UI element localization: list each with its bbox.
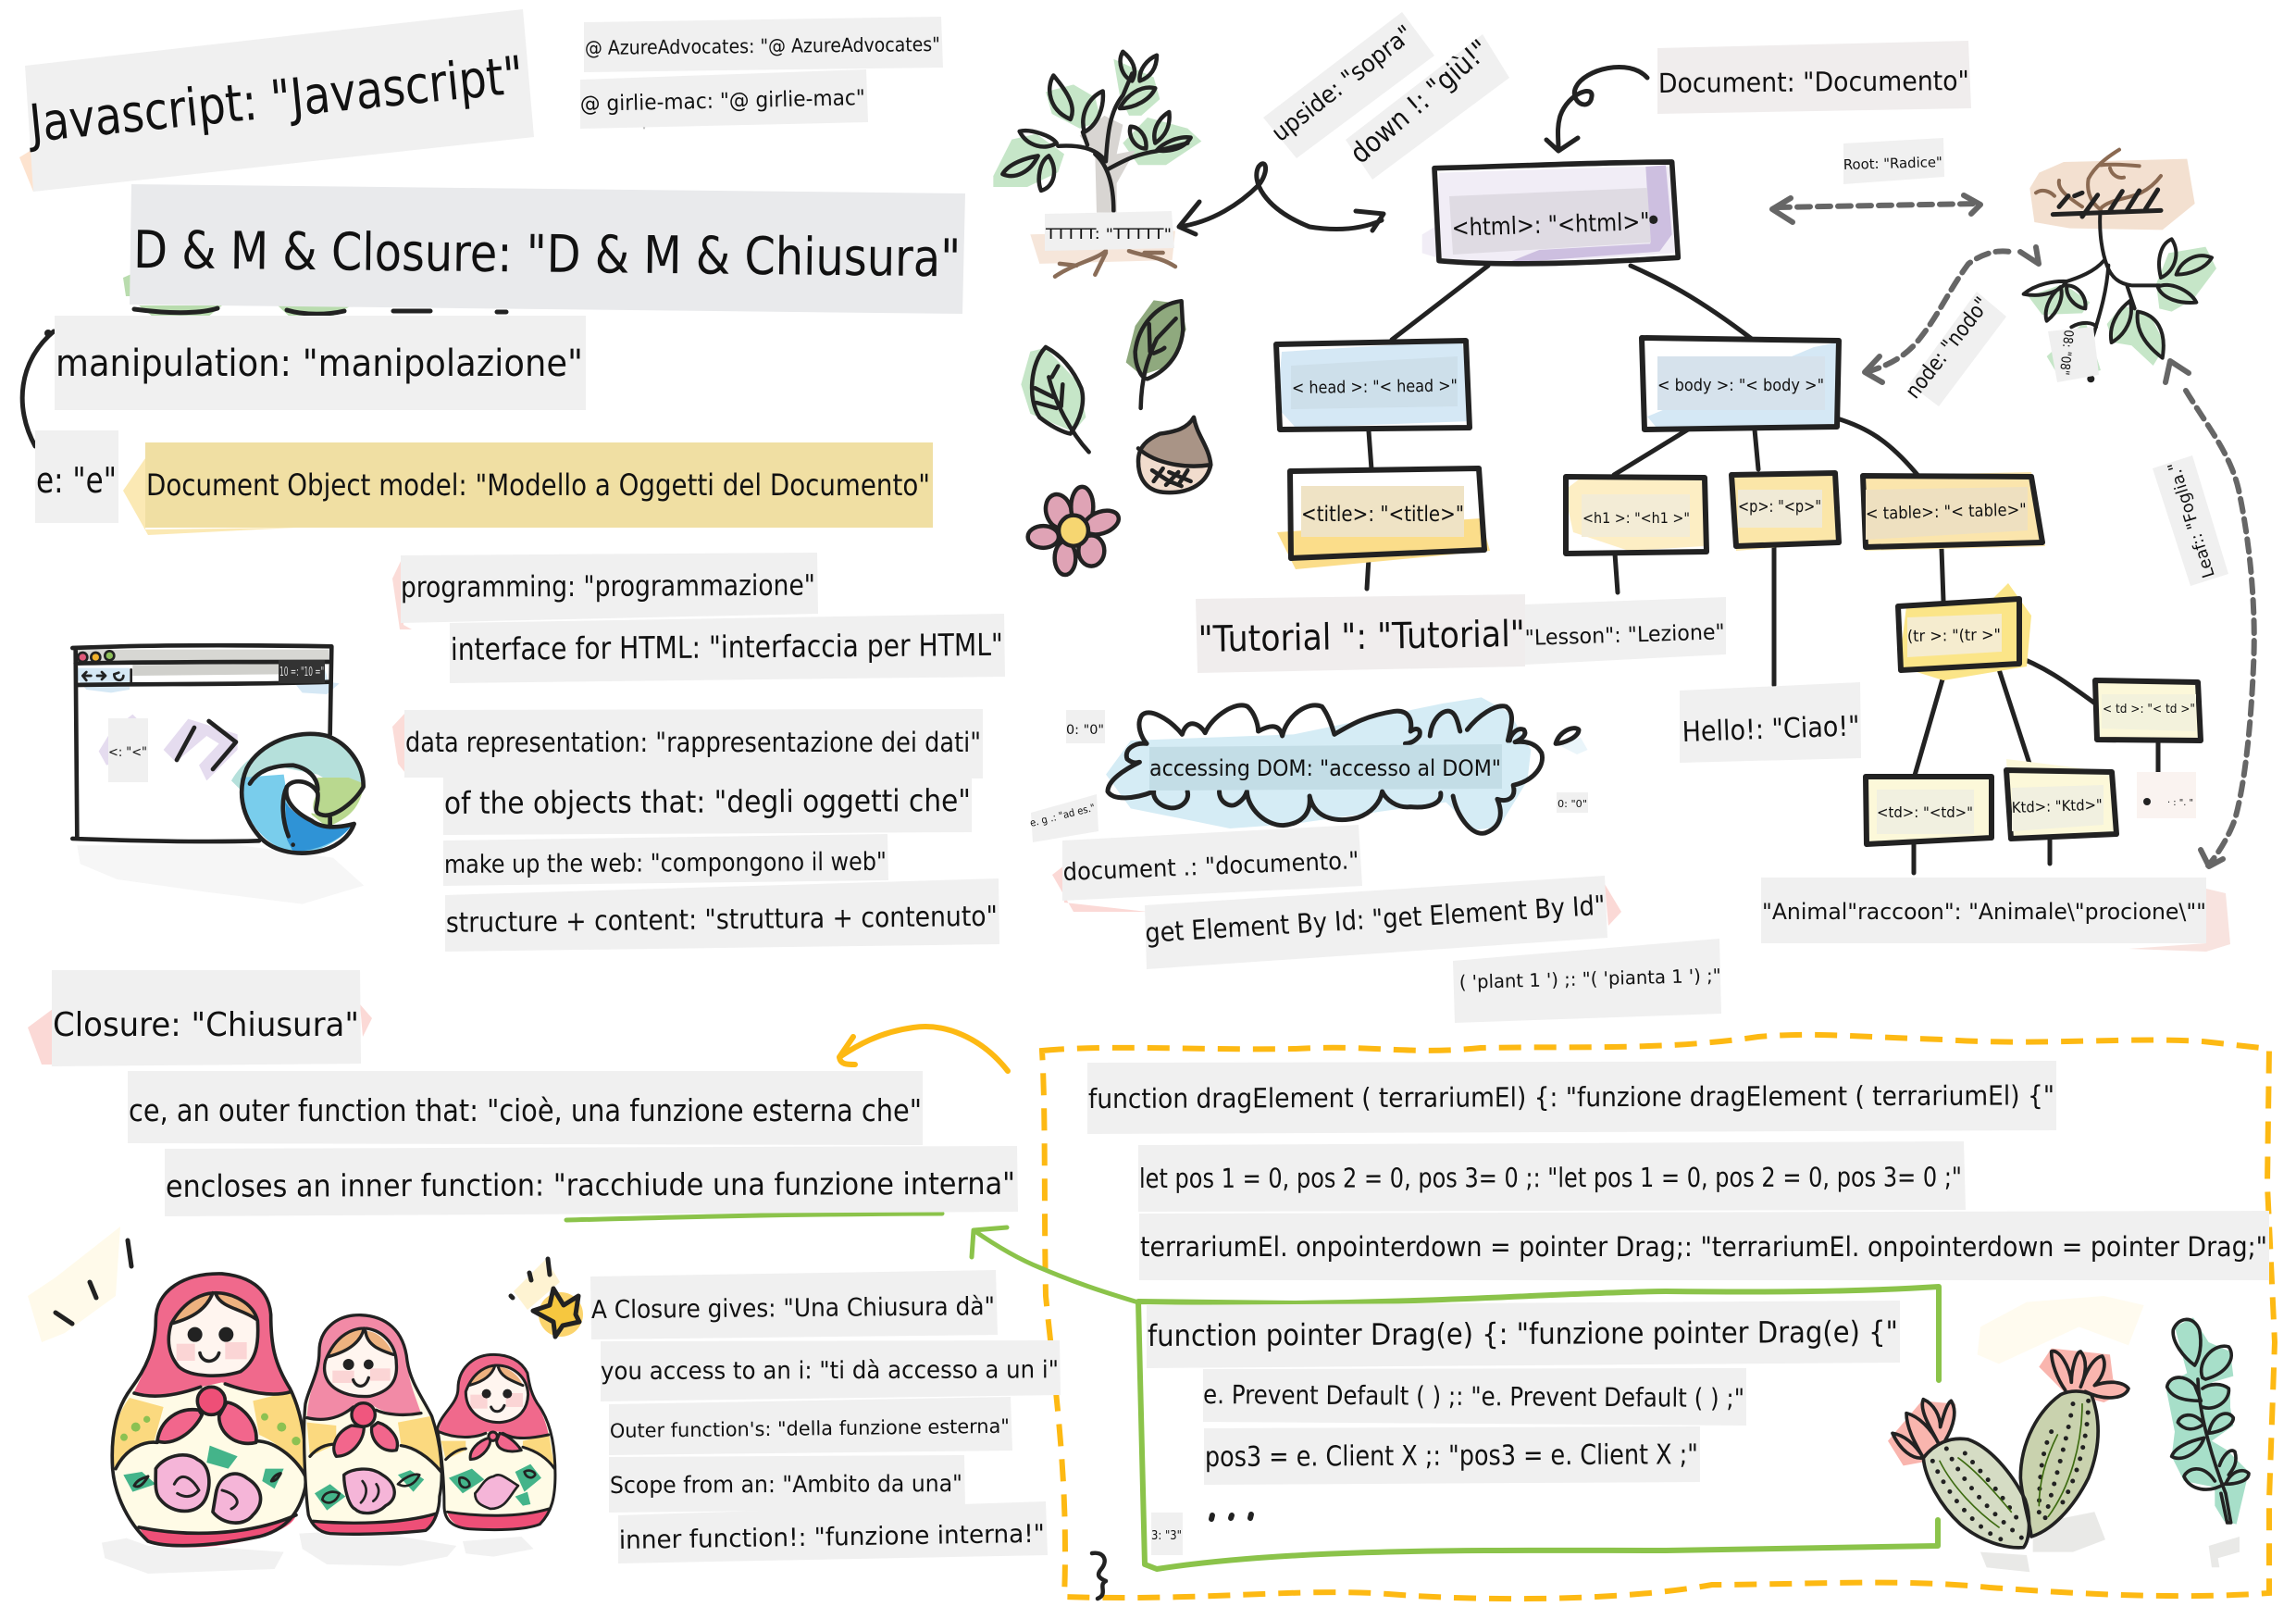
label: e (35, 430, 118, 523)
label: upside: upside: "sopra" (1267, 20, 1419, 148)
icon: Edge logo (231, 734, 364, 853)
decorative washes behind headings (19, 118, 2230, 1065)
label: body node (1657, 356, 1825, 410)
arrow: node double dashed (1865, 247, 2039, 382)
label: head node (1291, 356, 1458, 409)
label: AzureAdvocates (584, 17, 943, 72)
text block: DOM definition: of the objects that: "degli oggetti che" (444, 782, 971, 821)
closing curly brace (1092, 1553, 1106, 1599)
label: e: e: "e" (36, 460, 117, 501)
code sample: document.getElementById: ( 'plant 1 ') ;: "( 'pianta 1 ') ;" (1459, 965, 1721, 993)
small labels around cloud: 0: "0" (1558, 798, 1587, 810)
browser window (72, 645, 364, 904)
label: Lesson (1524, 597, 1726, 665)
text block: closure gives access: A Closure gives: "Una Chiusura dà" (591, 1292, 995, 1325)
label: leaf (2153, 455, 2228, 586)
icon: acorn (1138, 417, 1210, 492)
label: manipulation: manipulation: "manipolazione" (56, 342, 583, 385)
heading: Document Object model: Document Object model: "Modello a Oggetti del Documento" (146, 467, 930, 503)
head node box (1276, 341, 1471, 430)
label: table node: < table>: "< table>" (1866, 500, 2027, 524)
label: Animal raccoon: "Animal"raccoon": "Animale\"procione\"" (1762, 899, 2206, 925)
arrow: green inner function pointer (972, 1227, 1138, 1302)
code block: pointerDrag: e. Prevent Default ( ) ;: "e. Prevent Default ( ) ;" (1203, 1379, 1744, 1414)
label: Hello (1680, 682, 1861, 763)
icon: green leaf (1021, 347, 1089, 452)
small labels around cloud: e. g .: "ad es." (1029, 802, 1097, 829)
text block: DOM definition: data representation: "rappresentazione dei dati" (405, 727, 981, 758)
label: title node: <title>: "<title>" (1301, 503, 1464, 527)
label: 08 (2048, 327, 2099, 382)
arrow: up and down swirl (1179, 164, 1384, 234)
label: Root: Root: "Radice" (1843, 154, 1942, 173)
label: html node (1449, 188, 1651, 255)
dolls shadow (102, 1532, 534, 1574)
small labels around cloud: 0: "0" (1066, 723, 1104, 738)
label: head node: < head >: "< head >" (1292, 377, 1458, 398)
text block: closure definition (128, 1071, 1018, 1216)
text block: closure gives access: inner function!: "funzione interna!" (619, 1520, 1045, 1555)
icon: flower (1028, 487, 1121, 575)
label: girlie-mac (580, 69, 868, 129)
green function frame (1138, 1287, 1939, 1569)
tr node box (1898, 583, 2031, 680)
browser labels: <: "<" (108, 745, 147, 760)
code sample: document.getElementById: document .: "documento." (1062, 847, 1359, 887)
text block: DOM definition: programming: "programmazione" (401, 569, 815, 604)
text block: closure gives access: Outer function's: "della funzione esterna" (610, 1415, 1010, 1442)
label: left td node: <td>: "<td>" (1877, 803, 1973, 821)
td left node box (1866, 777, 1992, 844)
label: Javascript (24, 9, 534, 192)
label: Lesson: "Lesson": "Lezione" (1524, 620, 1725, 651)
code sample: document.getElementById: get Element By Id: "get Element By Id" (1144, 890, 1606, 949)
td right node box (2095, 680, 2201, 741)
label: html node: <html>: "<html>" (1451, 208, 1650, 243)
h1 node box (1564, 477, 1707, 554)
label: right td node: < td >: "< td >" (2103, 703, 2195, 716)
illustration: large nesting doll (112, 1274, 306, 1548)
label: Ktd node: Ktd>: "Ktd>" (2011, 796, 2103, 816)
label: Hello: Hello!: "Ciao!" (1682, 710, 1860, 749)
label: accessing DOM (1149, 744, 1502, 791)
title node box (1277, 468, 1490, 569)
heading: Document Object model (145, 442, 933, 528)
text block: DOM definition: structure + content: "struttura + contenuto" (446, 901, 998, 940)
code block: pointerDrag: pos3 = e. Client X ;: "pos3 = e. Client X ;" (1205, 1438, 1698, 1474)
root plant illustration (2024, 150, 2216, 382)
label: down: down !: "giù!" (1344, 33, 1496, 170)
heading: Closure: Closure: "Chiusura" (53, 1006, 359, 1044)
text block: closure gives access (590, 1270, 1061, 1563)
label: title node (1301, 486, 1464, 537)
text block: DOM definition: make up the web: "compongono il web" (444, 848, 887, 879)
label: Tutorial (1196, 594, 1525, 673)
body node box (1642, 338, 1839, 430)
label: Animal raccoon (1761, 878, 2206, 943)
label: accessing DOM: accessing DOM: "accesso al DOM" (1149, 755, 1501, 781)
label: manipulation (55, 316, 586, 410)
label: node: node: "nodo" (1901, 293, 1994, 404)
title: D & M & Closure: D & M & Closure: "D & M & Chiusura" (133, 220, 961, 289)
plant illustration with soil (993, 52, 1201, 277)
label: TTTTT: TTTTT: "TTTTT" (1045, 225, 1172, 243)
label: left td node (1877, 790, 1974, 834)
label: girlie-mac: @ girlie-mac: "@ girlie-mac" (580, 86, 865, 117)
label: Ktd node (2011, 785, 2104, 831)
browser labels (108, 660, 325, 782)
code block: pointerDrag (1147, 1301, 1900, 1555)
p node box (1731, 473, 1839, 551)
label: Javascript: Javascript: "Javascript" (24, 45, 527, 155)
arrow: yellow outer function pointer (839, 1027, 1008, 1071)
text block: closure gives access: you access to an i: "ti dà accesso a un i" (601, 1356, 1059, 1386)
label: TTTTT (1045, 211, 1174, 251)
sparkle washes and ticks around dolls (28, 1227, 560, 1342)
browser labels: 10 =: "10 =" (279, 666, 324, 679)
text block: closure gives access: Scope from an: "Ambito da una" (610, 1470, 962, 1499)
html node box (1422, 162, 1678, 264)
label: tr node (1907, 614, 2002, 657)
label: Root (1843, 138, 1944, 184)
Ktd node box (2006, 759, 2116, 839)
arrow: leaf double dashed (2166, 361, 2254, 866)
label: h1 node: <h1 >: "<h1 >" (1582, 509, 1690, 527)
text block: DOM definition (401, 553, 1005, 952)
icon: star (533, 1289, 583, 1337)
label: 08: 08: "08" (2056, 330, 2076, 376)
label: Document (1657, 41, 1971, 114)
label: h1 node (1582, 494, 1690, 537)
code block: dragElement (1087, 1061, 2269, 1280)
code block: dragElement: function dragElement ( terrariumEl) {: "funzione dragElement ( terrariumEl) {" (1088, 1079, 2054, 1115)
title: D & M & Closure (130, 184, 965, 314)
illustration: medium nesting doll (304, 1315, 441, 1534)
table node box (1863, 472, 2045, 551)
cloud: accessing DOM (1106, 697, 1588, 833)
label: small dots (2137, 772, 2196, 818)
ellipsis dots (1211, 1514, 1251, 1519)
label: Tutorial: "Tutorial ": "Tutorial" (1198, 614, 1525, 661)
yellow dashed code frame (1042, 1035, 2275, 1599)
label: tr node: (tr >: "(tr >" (1907, 626, 2001, 646)
illustration: small nesting doll (438, 1354, 555, 1530)
code block: pointerDrag: function pointer Drag(e) {: "funzione pointer Drag(e) {" (1148, 1314, 1898, 1353)
green underline (566, 1214, 942, 1220)
small labels around cloud (1029, 710, 1588, 842)
text block: closure definition: encloses an inner function: "racchiude una funzione interna" (166, 1165, 1015, 1204)
label: p node: <p>: "<p>" (1738, 497, 1821, 517)
label: leaf: Leaf:: "Foglia." (2165, 460, 2219, 580)
label: Document: Document: "Documento" (1658, 65, 1969, 99)
label: small dots: · : ". " (2167, 798, 2193, 808)
code block: pointerDrag: 3: "3" (1151, 1529, 1182, 1543)
label: table node (1866, 487, 2028, 540)
label: body node: < body >: "< body >" (1657, 376, 1824, 395)
tree connecting lines (1367, 266, 2158, 873)
label: p node (1738, 490, 1822, 528)
heading: Closure (52, 970, 361, 1066)
code block: dragElement: let pos 1 = 0, pos 2 = 0, pos 3= 0 ;: "let pos 1 = 0, pos 2 = 0, pos 3= 0 ;" (1139, 1161, 1962, 1194)
arrow: root double dashed (1772, 195, 1980, 222)
code sample: document.getElementById (1062, 825, 1721, 1023)
icon: dark leaf (1126, 300, 1186, 408)
illustration: cactus (1888, 1296, 2144, 1572)
text block: DOM definition: interface for HTML: "interfaccia per HTML" (451, 627, 1003, 667)
text block: closure definition: ce, an outer function that: "cioè, una funzione esterna che" (129, 1092, 922, 1128)
label: right td node (2102, 694, 2196, 731)
arrow: document to html (1546, 67, 1647, 151)
label: AzureAdvocates: @ AzureAdvocates: "@ AzureAdvocates" (585, 33, 940, 59)
illustration: sprig (2166, 1317, 2249, 1567)
